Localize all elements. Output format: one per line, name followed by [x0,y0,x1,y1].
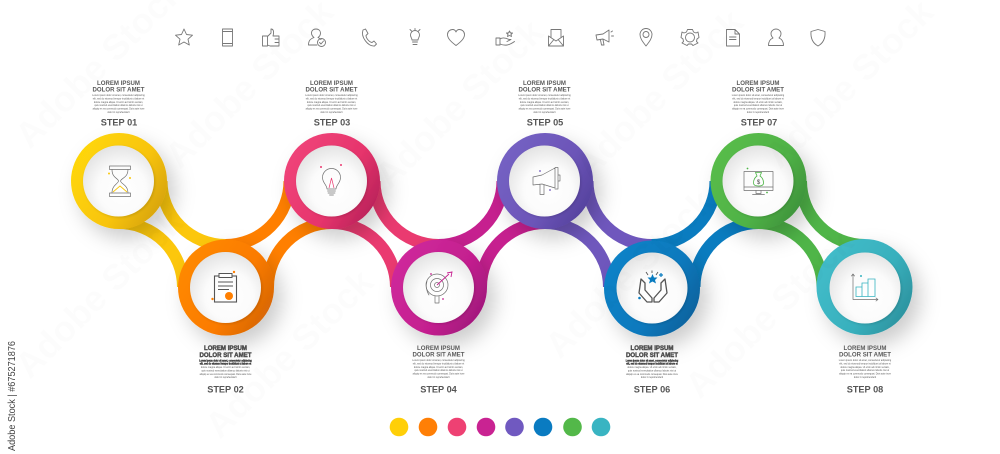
text block: step 06: elit, sed do eiusmod tempor incididunt ut labore et [626,362,678,366]
text block: step 08: quis nostrud exercitation ullamco laboris nisi ut [841,369,889,372]
text block: step 04: aliquip ex ea commodo consequat. Duis aute irure [413,373,465,376]
text block: step 03 [305,80,358,128]
text block: step 02: elit, sed do eiusmod tempor incididunt ut labore et [200,362,252,366]
text block: step 02: dolore magna aliqua. Ut enim ad minim veniam, [201,366,250,369]
text block: step 05: dolore magna aliqua. Ut enim ad minim veniam, [520,101,569,104]
text block: step 03: STEP 03 [314,118,350,128]
stock id caption: Adobe Stock | #675271876 [6,341,18,451]
text block: step 01: STEP 01 [101,118,137,128]
text block: step 08: dolore magna aliqua. Ut enim ad minim veniam, [840,366,890,369]
step 01 circle [71,133,167,229]
text block: step 07: elit, sed do eiusmod tempor incididunt ut labore et [732,97,784,100]
icon: light bulb [320,164,342,195]
text block: step 03: Lorem ipsum dolor sit amet, consectetur adipiscing [305,94,358,97]
icon row [176,28,825,46]
icon: hand with star [496,31,514,45]
text block: step 05: Lorem ipsum dolor sit amet, consectetur adipiscing [518,94,571,97]
text block: step 02: aliquip ex ea commodo consequat. Duis aute irure [200,373,252,376]
icon: heart [448,30,464,46]
text block: step 07: STEP 07 [741,118,777,128]
icon: hourglass [108,166,131,196]
step 06 circle [604,240,700,336]
text block: step 05: elit, sed do eiusmod tempor incididunt ut labore et [519,97,571,100]
text block: step 08 [839,345,892,394]
text block: step 06: aliquip ex ea commodo consequat. Duis aute irure [626,373,679,376]
icon: gear [681,30,699,46]
icon: shield [811,30,825,46]
text block: step 06 [626,345,679,394]
text block: step 01: elit, sed do eiusmod tempor incididunt ut labore et [93,97,145,100]
icon: bulb [410,28,420,44]
text block: step 03: DOLOR SIT AMET [306,86,358,94]
icon: person [768,29,784,46]
icon: bar chart [852,274,878,301]
text block: step 03: dolor in reprehenderit [320,111,343,114]
text block: step 04: elit, sed do eiusmod tempor incididunt ut labore et [413,362,465,365]
text block: step 08: DOLOR SIT AMET [839,352,891,358]
step 03 circle [284,133,380,229]
text block: step 04: quis nostrud exercitation ullamco laboris nisi ut [414,369,463,372]
icon: hands holding a star [638,270,667,302]
text block: step 06: Lorem ipsum dolor sit amet, consectetur adipiscing [626,360,679,362]
step 05 circle [497,133,593,229]
text block: step 01: quis nostrud exercitation ullamco laboris nisi ut [94,104,143,107]
text block: step 07: aliquip ex ea commodo consequat. Duis aute irure [732,108,785,111]
text block: step 07: quis nostrud exercitation ullamco laboris nisi ut [734,104,782,107]
text block: step 02: LOREM IPSUM [204,345,247,352]
text block: step 06: STEP 06 [634,384,670,394]
text block: step 04: dolore magna aliqua. Ut enim ad minim veniam, [414,366,463,369]
text block: step 03: aliquip ex ea commodo consequat. Duis aute irure [306,108,358,111]
text block: step 08: STEP 08 [847,384,883,394]
icon: map pin [640,28,652,46]
icon: document [726,30,740,46]
text block: step 03: elit, sed do eiusmod tempor incididunt ut labore et [306,97,358,100]
text block: step 04 [412,345,465,394]
text block: step 06: quis nostrud exercitation ullamco laboris nisi ut [628,369,676,372]
text block: step 07: dolor in reprehenderit [747,111,769,114]
text block: step 04: DOLOR SIT AMET [413,352,465,358]
text block: step 02: Lorem ipsum dolor sit amet, consectetur adipiscing [199,360,252,362]
text block: step 07: Lorem ipsum dolor sit amet, consectetur adipiscing [732,94,785,97]
text block: step 01: dolore magna aliqua. Ut enim ad minim veniam, [94,101,143,104]
icon: target with dart [426,272,452,303]
icon: smartphone [222,29,232,46]
text block: step 04: Lorem ipsum dolor sit amet, consectetur adipiscing [412,359,465,362]
icon: thumbs up [262,29,279,46]
text block: step 04: dolor in reprehenderit [427,376,450,379]
text block: step 03: dolore magna aliqua. Ut enim ad minim veniam, [307,101,356,104]
icon: star [176,29,192,45]
icon: user with check [308,29,326,46]
text block: step 05: DOLOR SIT AMET [519,86,571,94]
text block: step 01: Lorem ipsum dolor sit amet, consectetur adipiscing [92,94,145,97]
text block: step 05 [518,80,571,128]
text block: step 04: LOREM IPSUM [417,345,460,352]
text block: step 05: STEP 05 [527,118,563,128]
text block: step 03: LOREM IPSUM [310,80,353,87]
step 08 circle [816,239,912,335]
text block: step 02: dolor in reprehenderit [214,376,237,379]
connector bands [119,181,865,287]
text block: step 02: quis nostrud exercitation ullamco laboris nisi ut [201,369,250,372]
step 07 circle [710,133,806,229]
text block: step 02: DOLOR SIT AMET [200,352,252,359]
text block: step 08: aliquip ex ea commodo consequat. Duis aute irure [839,373,892,376]
text block: step 06: LOREM IPSUM [630,345,674,352]
text block: step 06: dolor in reprehenderit [641,376,663,379]
text block: step 05: aliquip ex ea commodo consequat. Duis aute irure [519,108,571,111]
icon: monitor with money bag: $ [757,180,761,186]
step 02 circle [178,240,274,336]
text block: step 08: dolor in reprehenderit [854,376,876,379]
text block: step 01 [92,80,145,128]
icon: open envelope [548,30,564,46]
icon: megaphone [596,30,614,45]
step 04 circle [391,240,487,336]
icon: clipboard [211,271,236,302]
text block: step 02: STEP 02 [207,384,244,394]
text block: step 04: STEP 04 [420,384,458,394]
text block: step 02 [199,345,252,394]
text block: step 07 [732,80,785,128]
text block: step 07: dolore magna aliqua. Ut enim ad minim veniam, [733,101,783,104]
text block: step 05: dolor in reprehenderit [533,111,556,114]
text block: step 06: DOLOR SIT AMET [626,352,678,359]
text block: step 01: aliquip ex ea commodo consequat. Duis aute irure [93,108,145,111]
text block: step 08: LOREM IPSUM [844,345,886,352]
text block: step 05: LOREM IPSUM [523,80,566,87]
icon: megaphone [533,168,560,194]
text block: step 07: DOLOR SIT AMET [732,86,784,94]
icon: telephone [363,29,376,46]
text block: step 05: quis nostrud exercitation ullamco laboris nisi ut [520,104,569,107]
text block: step 08: elit, sed do eiusmod tempor incididunt ut labore et [839,362,891,365]
legend dots [390,418,610,436]
text block: step 01: LOREM IPSUM [97,80,140,87]
text block: step 07: LOREM IPSUM [736,80,780,87]
text block: step 01: DOLOR SIT AMET [93,86,145,94]
text block: step 01: dolor in reprehenderit [107,111,130,114]
text block: step 08: Lorem ipsum dolor sit amet, consectetur adipiscing [839,359,892,362]
text block: step 06: dolore magna aliqua. Ut enim ad minim veniam, [627,366,677,369]
text block: step 03: quis nostrud exercitation ullamco laboris nisi ut [307,104,356,107]
